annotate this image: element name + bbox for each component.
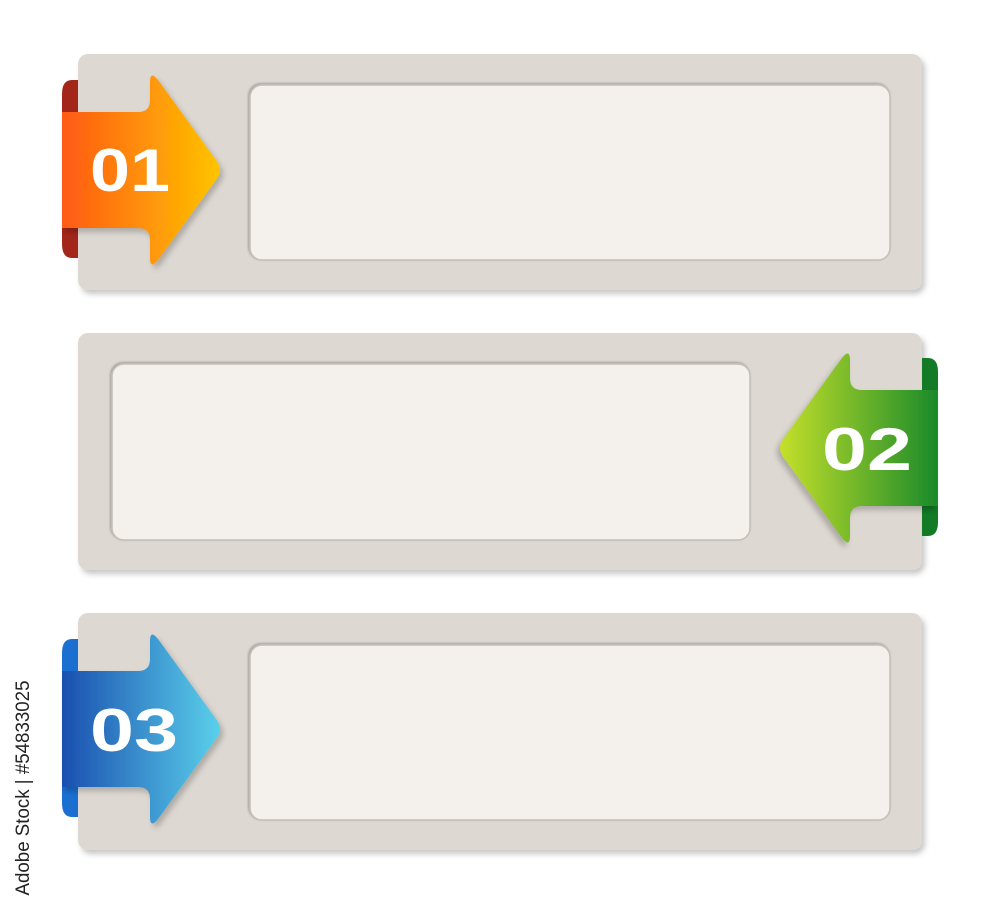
- watermark caption: Adobe Stock | #54833025: [13, 680, 34, 896]
- panel 2: [78, 333, 922, 570]
- arrow badge 02: [780, 353, 938, 543]
- text box 3: [250, 645, 890, 820]
- panel 3: [78, 613, 922, 850]
- arrow badge 02: 02: [822, 416, 912, 483]
- text box 1: [250, 85, 890, 260]
- arrow badge 03: [62, 634, 220, 824]
- panel 1: [78, 54, 922, 290]
- text box 2: [112, 364, 750, 540]
- arrow badge 03: 03: [90, 697, 178, 764]
- arrow badge 01: [62, 75, 220, 265]
- arrow badge 01: 01: [90, 137, 170, 204]
